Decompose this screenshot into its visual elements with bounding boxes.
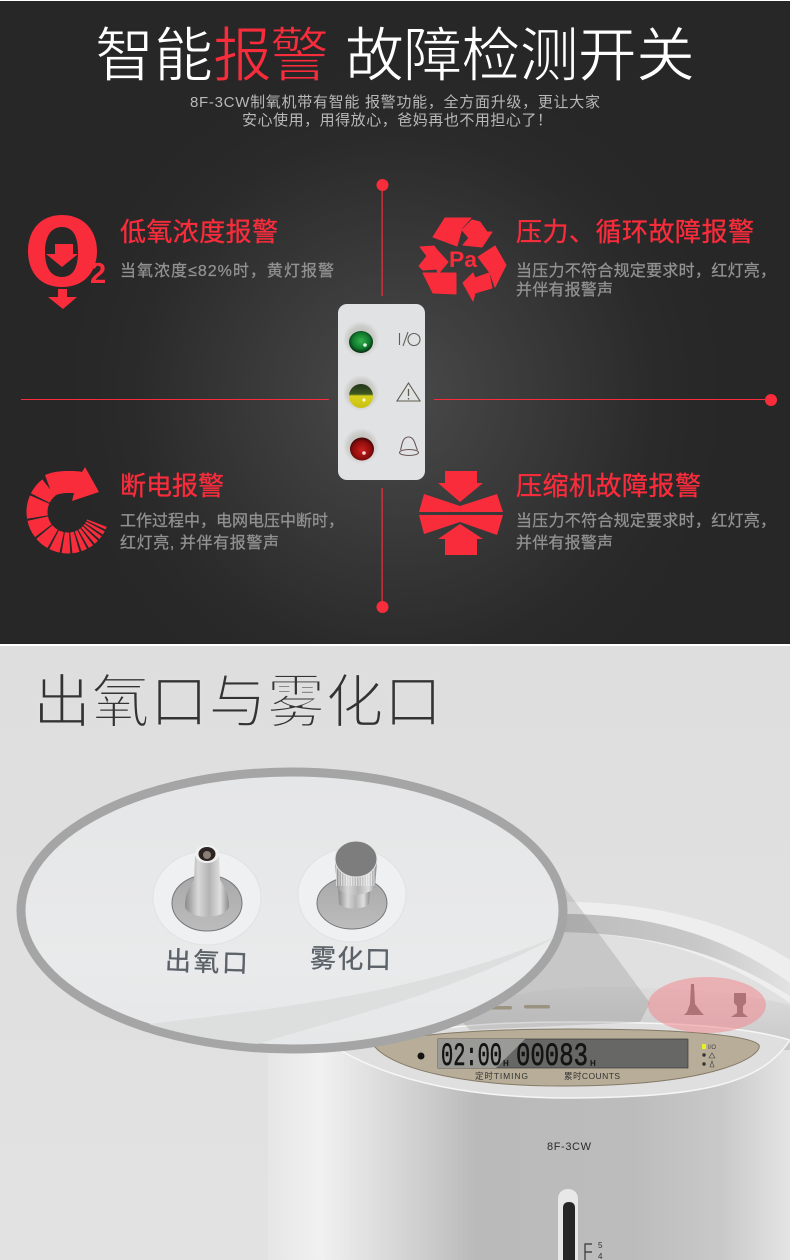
small port labels [485, 1005, 550, 1010]
status indicators: I/O [708, 1045, 716, 1051]
alarm item: compressor failure [419, 471, 776, 555]
LCD display: H [503, 1059, 509, 1068]
icon: yellow warning light [343, 375, 379, 411]
icon: segmented circular arrow [28, 467, 108, 552]
machine illustration [268, 902, 790, 1260]
description: 当氧浓度≤82%时，黄灯报警 [120, 262, 334, 280]
heading: 压力、循环故障报警 [516, 217, 754, 247]
description: 当压力不符合规定要求时，红灯亮， [516, 262, 776, 280]
port: atomizer outlet [298, 841, 406, 942]
title: 故障检测开关 [345, 23, 695, 89]
description: 工作过程中，电网电压中断时， [120, 512, 344, 530]
icon: red alarm light [343, 428, 379, 464]
title: 报警 [213, 23, 329, 89]
label: oxygen outlet: 出氧口 [165, 946, 248, 978]
lens surface curve [150, 935, 560, 1050]
handle [540, 902, 790, 1003]
icon: O2 down arrow [28, 215, 106, 309]
I/O label [400, 332, 420, 346]
description: 并伴有报警声 [516, 534, 613, 552]
LCD display: 02:00 [441, 1038, 502, 1075]
heading: 压缩机故障报警 [516, 471, 701, 501]
heading: 断电报警 [120, 471, 224, 501]
alarm item: pressure and circulation [419, 217, 776, 301]
label: atomizer outlet: 雾化口 [310, 943, 391, 975]
small atomizer port [731, 993, 748, 1017]
description [516, 262, 776, 299]
description: 红灯亮, 并伴有报警声 [120, 534, 279, 552]
small outlet port [684, 984, 704, 1015]
LCD display: 00083 [516, 1038, 588, 1075]
title [95, 23, 695, 89]
magnifier lens [21, 772, 563, 1050]
machine top dome [400, 987, 790, 1050]
indicator light panel [338, 304, 425, 480]
magnifier projection [440, 873, 650, 1030]
icon: compression arrows [419, 471, 503, 555]
control panel [375, 1029, 759, 1086]
description: 当压力不符合规定要求时，红灯亮， [516, 512, 776, 530]
LCD display: H [590, 1059, 596, 1068]
LCD display [438, 1038, 688, 1075]
icon: warning triangle [397, 383, 420, 401]
alarm item: power failure [28, 467, 344, 552]
highlight: port location [648, 977, 766, 1033]
red connector lines [21, 179, 777, 613]
description [120, 512, 344, 552]
status indicators [702, 1044, 716, 1067]
flow gauge [558, 1189, 603, 1260]
description: 并伴有报警声 [516, 281, 613, 299]
icon: O2 down arrow: 2 [90, 258, 106, 290]
machine body [268, 1040, 790, 1260]
subtitle text: 8F-3CW制氧机带有智能 报警功能，全方面升级，更让大家 [190, 93, 600, 111]
control rim [340, 1022, 790, 1098]
panel: dark alarm section [0, 0, 790, 644]
port: oxygen outlet [153, 845, 261, 945]
model name: 8F-3CW [547, 1141, 592, 1153]
title: 智能 [95, 23, 213, 89]
section title: 出氧口与雾化口 [33, 670, 442, 735]
heading: 低氧浓度报警 [120, 217, 278, 247]
icon: green power light [343, 321, 379, 357]
LCD captions: 累时COUNTS [564, 1071, 620, 1081]
description [516, 512, 776, 552]
subtitle text [190, 93, 600, 129]
LCD captions: 定时TIMING [475, 1071, 528, 1081]
icon: recycle arrows with Pa: Pa [449, 247, 478, 272]
alarm item: low oxygen [28, 215, 334, 309]
icon: bell [400, 437, 418, 456]
LCD captions [475, 1071, 620, 1081]
subtitle text: 安心使用，用得放心，爸妈再也不用担心了！ [242, 112, 552, 129]
flow gauge: 5 [598, 1241, 603, 1250]
panel: outlet section [0, 644, 790, 1260]
icon: recycle arrows with Pa [419, 218, 506, 301]
